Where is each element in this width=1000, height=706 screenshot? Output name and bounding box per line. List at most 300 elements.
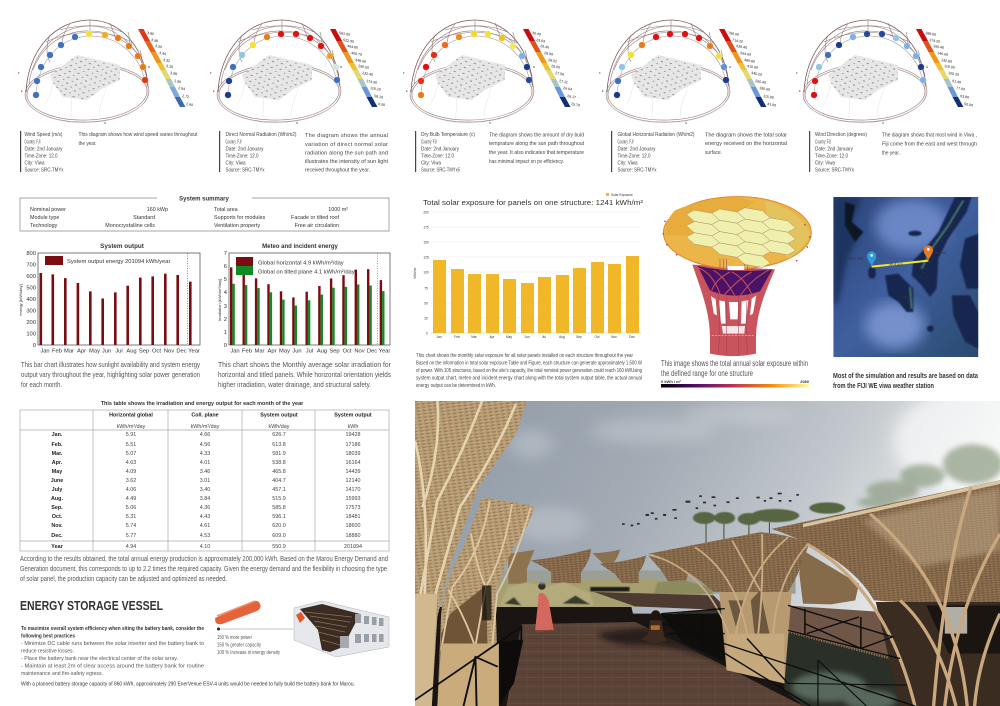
text: battery siting practices <box>21 626 204 677</box>
chart legend: System output energy 201094 kWh/year <box>67 259 171 265</box>
table: irradiation and energy output: Jan. <box>52 432 63 438</box>
panel: direct normal radiation sun path <box>210 20 388 174</box>
table: irradiation and energy output: 609.0 <box>272 533 286 539</box>
table: irradiation and energy output: 4.06 <box>126 487 136 493</box>
table: irradiation and energy output: 4.61 <box>200 523 210 529</box>
table: irradiation and energy output: 17186 <box>346 442 360 448</box>
legend: wind speed <box>138 29 193 107</box>
table: irradiation and energy output: 4.63 <box>126 460 136 466</box>
text: battery capacity note: With a planned battery storage capacity of 860 kWh, approximately 290 EnerVenue ESV-4 units would be needed to fully build the battery bank for Marou. <box>21 682 355 688</box>
chart axis labels: Dec <box>629 335 635 339</box>
axis labels: Year <box>188 348 200 354</box>
table: irradiation and energy output: 4.43 <box>200 514 210 520</box>
caption: global horizontal radiation data: Country: FJI <box>618 140 634 146</box>
table: irradiation and energy output: 4.01 <box>200 460 210 466</box>
axis labels: Mar <box>255 348 265 354</box>
pin: Marou: Marou <box>935 250 946 255</box>
table: irradiation and energy output: July <box>52 487 62 493</box>
legend: dry bulb temperature: 29.93 <box>536 38 545 44</box>
lower right ground <box>788 606 888 656</box>
description: wind direction: Fiji come from the east and west through <box>882 142 977 148</box>
legend: direct normal radiation: 581.00 <box>339 31 350 37</box>
chart: monthly solar exposure <box>413 193 644 339</box>
caption: wind direction data: Date: 2nd January <box>815 146 853 152</box>
canopy: large right <box>771 480 1000 706</box>
axis labels: energy [kWh/day] <box>18 284 23 316</box>
chart legend <box>236 257 355 276</box>
illustration: funnel structure solar exposure <box>662 197 811 356</box>
caption: direct normal radiation data: Date: 2nd January <box>226 146 264 152</box>
chart title: Meteo and incident energy <box>262 244 338 250</box>
chart axis labels: 175 <box>423 226 429 230</box>
description: direct normal radiation: received throughout the year. <box>305 168 370 174</box>
axis labels: Aug <box>317 348 327 354</box>
table: irradiation and energy output: 550.9 <box>272 544 286 550</box>
legend: wind speed: 3.56 <box>155 44 162 49</box>
canopy: distant right <box>799 551 859 604</box>
heading: system summary: System summary <box>179 196 230 202</box>
flock of birds <box>622 493 799 526</box>
text: system output explanation: This bar chart illustrates how sunlight availability and system energy <box>21 360 200 369</box>
table: irradiation and energy output: 18880 <box>346 533 360 539</box>
text: annual production conclusion: of solar panel, the production capacity can be adjusted and optimized as needed. <box>20 574 227 583</box>
text: solar exposure explanation: This chart shows the monthly solar exposure for all solar panels installed on each structure throughout the year <box>416 353 633 359</box>
legend: wind direction: 77.60 <box>956 86 965 92</box>
chart axis labels: Sep <box>576 335 582 339</box>
text: funnel structure explanation <box>661 359 808 378</box>
caption: wind direction data: Source: SRC-TMYx <box>815 168 854 174</box>
axis labels: 1 <box>224 330 227 336</box>
legend: global horizontal radiation: 489.80 <box>744 58 755 64</box>
description: dry bulb temperature: The diagram shows the amount of dry buld <box>489 132 584 138</box>
axis labels: 700 <box>26 262 36 268</box>
legend: direct normal radiation: 58.10 <box>374 94 383 100</box>
axis labels: 0 <box>33 343 36 349</box>
text: battery benefits: 100 % Increase in energy density <box>217 650 280 656</box>
summary rows: Technology <box>30 223 58 229</box>
legend: global horizontal radiation: 639.40 <box>736 44 747 50</box>
legend: wind direction: 119.00 <box>944 64 955 70</box>
table: irradiation and energy output: 5.51 <box>126 442 136 448</box>
chart axis labels: Jul <box>542 335 546 339</box>
legend: direct normal radiation: 464.80 <box>347 44 358 50</box>
chart axis labels: Aug <box>559 335 565 339</box>
table: irradiation and energy output: 18039 <box>346 451 360 457</box>
description: direct normal radiation: radiation along the sun path and <box>305 150 388 156</box>
axis labels: Irradiation [kWh/m²/day] <box>217 279 222 321</box>
sun positions: dry bulb temperature <box>418 31 532 98</box>
table: irradiation and energy output: 4.66 <box>200 432 210 438</box>
table: irradiation and energy output: 17573 <box>346 505 360 511</box>
chart axis labels: 200 <box>423 210 429 214</box>
table: irradiation and energy output: 12140 <box>346 478 360 484</box>
summary rows: Supports for modules <box>214 215 266 221</box>
text: solar exposure explanation: energy output can be determined in kWh. <box>416 383 496 389</box>
legend: wind speed: 3.32 <box>163 58 170 63</box>
description: dry bulb temperature: the year. It also indicates that temperature <box>489 150 584 156</box>
axis labels: Dec <box>176 348 187 354</box>
table: irradiation and energy output: Coll. plane <box>191 412 219 418</box>
caption: dry bulb temperature data: Country: FJI <box>421 140 437 146</box>
axis labels: Feb <box>52 348 62 354</box>
table: irradiation and energy output: 5.91 <box>126 432 136 438</box>
caption: dry bulb temperature data: Time-Zone: 12.0 <box>421 154 454 160</box>
legend: exposure colour scale: 0 kWh / m² <box>661 379 682 384</box>
legend: wind direction: 63.80 <box>960 94 969 100</box>
legend: global horizontal radiation: 115.80 <box>763 94 774 100</box>
legend: direct normal radiation: 232.40 <box>362 71 373 77</box>
railing <box>415 605 915 706</box>
table: irradiation and energy output: 14170 <box>346 487 360 493</box>
text: solar exposure explanation: Based on the information in total solar exposure Table and Figure, each structure can generate approximately 1,500 W <box>416 360 643 366</box>
caption: wind speed data: Date: 2nd January <box>24 146 63 152</box>
legend: direct normal radiation: 290.50 <box>358 64 369 70</box>
caption: wind speed data <box>20 131 64 174</box>
summary rows: Module type <box>30 215 59 221</box>
text: battery siting practices: - Place the battery bank near the electrical center of the solar array. <box>21 656 178 662</box>
legend: global horizontal radiation: 265.40 <box>755 79 766 85</box>
text: data source note: from the FIJI WE viwa weather station <box>833 381 934 390</box>
pin: Marou <box>924 245 946 260</box>
axis labels: 200 <box>26 320 36 326</box>
table: irradiation and energy output: 465.8 <box>272 469 286 475</box>
legend: dry bulb temperature: 26.17 <box>567 94 576 100</box>
legend: wind speed: 3.80 <box>147 31 154 36</box>
axis labels: Nov <box>164 348 174 354</box>
text: system output explanation: output vary throughout the year, highlighting solar power generation <box>21 370 200 379</box>
axis labels: Feb <box>242 348 252 354</box>
table: irradiation and energy output: System output <box>334 412 372 418</box>
legend: direct normal radiation: 522.90 <box>343 38 354 44</box>
chart axis labels: 75 <box>424 286 428 290</box>
legend: wind direction: 160.40 <box>933 44 944 50</box>
caption: wind speed data: Country: FJI <box>24 140 41 146</box>
description: dry bulb temperature <box>489 132 584 165</box>
description: wind direction: the year. <box>882 150 900 156</box>
legend: wind speed: 2.84 <box>178 86 185 91</box>
table: irradiation and energy output: 5.07 <box>126 451 136 457</box>
text: funnel structure explanation: This image shows the total annual solar exposure within <box>661 359 808 368</box>
table: irradiation and energy output: Oct. <box>52 514 63 520</box>
table: irradiation and energy output: System output <box>260 412 298 418</box>
distant horizon <box>497 570 796 594</box>
text: battery benefits: 150 % greater capacity <box>217 642 261 648</box>
table: irradiation and energy output: 18481 <box>346 514 360 520</box>
legend: wind direction: 132.80 <box>941 58 952 64</box>
legend: global horizontal radiation: 190.60 <box>759 86 770 92</box>
legend: wind speed: 2.96 <box>174 79 181 84</box>
table: irradiation and energy output: 4.36 <box>200 505 210 511</box>
legend: global horizontal radiation: 340.20 <box>751 71 762 77</box>
description: global horizontal radiation: The diagram shows the total solar <box>705 132 787 138</box>
solar panel hexagons <box>686 197 796 273</box>
figure: seated woman <box>641 610 667 644</box>
legend: direct normal radiation: 0.00 <box>378 102 385 107</box>
table: irradiation and energy output: Aug. <box>51 496 63 502</box>
axis labels: Jun <box>102 348 111 354</box>
description: global horizontal radiation: surface. <box>705 150 722 156</box>
text: annual production conclusion <box>20 554 388 583</box>
legend: direct normal radiation: 174.30 <box>366 79 377 85</box>
legend: wind direction: 91.40 <box>952 79 961 85</box>
text: annual production conclusion: Generation document, this corresponds to up to 2.2 times the required capacity. Given the energy demand and the flexibility in choosing the type <box>20 564 387 573</box>
table: irradiation and energy output: 404.7 <box>272 478 286 484</box>
caption: wind direction data: Wind Direction (degrees) <box>815 132 867 138</box>
caption: global horizontal radiation data: Source: SRC-TMYx <box>618 168 657 174</box>
axis labels: Jan <box>230 348 240 354</box>
description: dry bulb temperature: has minimal impact on pv efficiency. <box>489 159 564 165</box>
caption: direct normal radiation data: Source: SRC-TMYx <box>226 168 265 174</box>
legend: wind speed: 3.20 <box>166 64 173 69</box>
table: irradiation and energy output: Dec. <box>51 533 63 539</box>
text: annual production conclusion: According to the results obtained, the total annual energy production is approximately 200,000 kWh. Based on the Marou Energy Demand and <box>20 554 388 563</box>
table: irradiation and energy output: 4.56 <box>200 442 210 448</box>
legend: wind direction: 50.00 <box>964 102 973 108</box>
legend: wind direction: 188.00 <box>925 31 936 37</box>
chart axis labels: May <box>506 335 512 339</box>
table: irradiation and energy output: May <box>52 469 62 475</box>
legend: direct normal radiation: 406.70 <box>351 51 362 57</box>
description: wind speed <box>78 132 198 147</box>
legend: dry bulb temperature: 26.64 <box>563 86 572 92</box>
sun positions: wind direction <box>811 31 926 98</box>
axis labels: 6 <box>224 264 227 270</box>
panel: global horizontal radiation sun path <box>599 20 787 174</box>
text: battery benefits <box>217 635 280 656</box>
text: solar exposure explanation: of power. With 105 structures, based on the site's capacity, the total nominal power generation could reach 160 kWUsing <box>416 368 642 374</box>
text: battery siting practices: maintenance and fire-safety egress. <box>21 671 103 677</box>
table: irradiation and energy output: Nov. <box>51 523 63 529</box>
axis labels: Apr <box>77 348 86 354</box>
axis labels: Sep <box>329 348 340 354</box>
description: direct normal radiation: The diagram shows the annual <box>305 133 388 139</box>
grasses and hedges <box>499 580 713 607</box>
table: irradiation and energy output: 457.1 <box>272 487 286 493</box>
table: irradiation and energy output: June <box>51 478 63 484</box>
legend: dry bulb temperature: 28.05 <box>551 64 560 70</box>
chart axis labels: Feb <box>454 335 460 339</box>
caption: wind direction data <box>809 131 867 174</box>
pin: Viwa: Viwa 3381 Fiji <box>838 256 863 261</box>
legend: dry bulb temperature: 25.70 <box>571 102 580 108</box>
caption: direct normal radiation data <box>219 131 297 174</box>
table: irradiation and energy output: 5.74 <box>126 523 136 529</box>
description: dry bulb temperature: temprature along the sun path throughout <box>489 141 584 147</box>
sky <box>415 401 1000 614</box>
panel: wind direction sun path <box>796 20 977 174</box>
axis labels: 0 <box>224 343 227 349</box>
legend: exposure colour scale <box>661 379 810 388</box>
legend: exposure colour scale: 2080 <box>800 379 810 384</box>
description: direct normal radiation: illustrates the intensity of sun light <box>305 159 388 165</box>
description: wind direction <box>882 132 977 156</box>
table: irradiation and energy output: 14439 <box>346 469 360 475</box>
text: meteo chart explanation: horizontal and titled panels. While horizontal orientation yields <box>218 370 391 379</box>
description: direct normal radiation <box>305 133 388 174</box>
description: global horizontal radiation <box>705 132 787 156</box>
table: irradiation and energy output: 18600 <box>346 523 360 529</box>
global on tilted plane bars <box>232 284 384 345</box>
legend: wind speed: 2.60 <box>186 102 193 107</box>
chart axis labels: Oct <box>595 335 600 339</box>
text: data source note <box>833 371 979 390</box>
axis labels: 300 <box>26 308 36 314</box>
legend: wind speed: 3.08 <box>170 71 177 76</box>
chart axis labels: Mar <box>471 335 478 339</box>
table: irradiation and energy output: 3.84 <box>200 496 210 502</box>
description: wind speed: the year. <box>78 141 97 147</box>
table: irradiation and energy output: 3.46 <box>200 469 210 475</box>
chart axis labels: 150 <box>423 240 429 244</box>
table: irradiation and energy output: Horizontal global <box>109 412 153 418</box>
text: battery siting practices: - Maintain at least 2m of clear access around the battery bank for routine <box>21 664 204 670</box>
axis labels: May <box>89 348 100 354</box>
summary rows: 160 kWp <box>147 207 168 213</box>
table: irradiation and energy output: 4.33 <box>200 451 210 457</box>
plaza and planter wall <box>594 592 728 610</box>
panel: system summary <box>20 196 389 231</box>
table: irradiation and energy output: 19428 <box>346 432 360 438</box>
panel: dry bulb temperature sun path <box>403 20 584 174</box>
text: system output explanation: for each month. <box>21 380 62 389</box>
table: irradiation and energy output: 3.62 <box>126 478 136 484</box>
chart axis labels: 25 <box>424 316 428 320</box>
table: irradiation and energy output: 4.10 <box>200 544 210 550</box>
chart legend: Solar Exposure <box>611 193 633 197</box>
figure: walking woman <box>535 582 557 632</box>
chart title: System output <box>100 243 145 250</box>
table: irradiation and energy output: 3.01 <box>200 478 210 484</box>
legend: direct normal radiation: 116.20 <box>370 86 381 92</box>
canopy: large left foreground <box>415 401 527 706</box>
text: battery benefits: 150 % more power <box>217 635 252 641</box>
axis labels: 5 <box>224 277 227 283</box>
summary rows: Facade or tilted roof <box>291 215 339 221</box>
axis labels: Mar <box>64 348 74 354</box>
panel: wind speed sun path <box>18 20 198 174</box>
axis labels: Oct <box>152 348 161 354</box>
table: irradiation and energy output: 5.31 <box>126 514 136 520</box>
caption: dry bulb temperature data: City: Viwa <box>421 160 442 166</box>
summary rows: Free air circulation <box>295 223 339 229</box>
axis labels: Apr <box>267 348 277 354</box>
description: wind speed: This diagram shows how wind speed varies throughout <box>78 132 198 138</box>
axis labels: Jan <box>40 348 50 354</box>
caption: dry bulb temperature data <box>415 131 475 174</box>
summary rows: 1000 m² <box>328 207 348 213</box>
table: irradiation and energy output: kWh <box>348 424 358 430</box>
table: irradiation and energy output: Apr. <box>52 460 63 466</box>
table: irradiation and energy output: 585.8 <box>272 505 286 511</box>
axis labels: 100 <box>26 332 36 338</box>
text: meteo chart explanation <box>218 360 391 389</box>
summary rows: Total area <box>214 207 238 213</box>
table: irradiation and energy output: Feb. <box>51 442 63 448</box>
caption: global horizontal radiation data: Date: 2nd January <box>618 146 656 152</box>
axis labels <box>217 251 390 354</box>
table: irradiation and energy output: Mar. <box>52 451 63 457</box>
table: irradiation and energy output: 4.09 <box>126 469 136 475</box>
caption: wind direction data: Time-Zone: 12.0 <box>815 154 848 160</box>
table: irradiation and energy output: kWh/m²/day <box>191 424 220 430</box>
table: irradiation and energy output: Year <box>51 544 64 550</box>
legend: wind speed: 2.72 <box>182 94 189 99</box>
photo: bamboo canopy walkway rendering <box>415 388 1000 706</box>
axis labels: 800 <box>26 251 36 257</box>
legend: wind speed: 3.68 <box>151 38 158 43</box>
table: irradiation and energy output: 515.9 <box>272 496 286 502</box>
caption: wind direction data: Country: FJI <box>815 140 831 146</box>
table: irradiation and energy output: 626.7 <box>272 432 286 438</box>
table: irradiation and energy output: 596.1 <box>272 514 286 520</box>
legend: wind direction: 105.20 <box>948 71 959 77</box>
table: irradiation and energy output: 5.77 <box>126 533 136 539</box>
caption: wind direction data: City: Viwa <box>815 160 836 166</box>
chart axis labels: Jan <box>436 335 442 339</box>
caption: wind speed data: City: Viwa <box>24 160 45 166</box>
map: Viwa to Marou: Yalobi <box>899 294 910 299</box>
sun positions: direct normal radiation <box>225 31 340 98</box>
axis labels: Sep <box>139 348 149 354</box>
axis labels: Oct <box>342 348 352 354</box>
icon: battery vessel <box>215 601 293 630</box>
table: irradiation and energy output: 4.53 <box>200 533 210 539</box>
table: irradiation and energy output: 4.94 <box>126 544 136 550</box>
caption: direct normal radiation data: Country: FJI <box>226 140 242 146</box>
table: irradiation and energy output: 3.40 <box>200 487 210 493</box>
table: irradiation and energy output: 581.9 <box>272 451 286 457</box>
caption: direct normal radiation data: City: Viwa <box>226 160 246 166</box>
palm trees <box>693 444 1000 544</box>
text: meteo chart explanation: higher irradiation, water drainage, and structural safety. <box>218 380 371 389</box>
chart axis labels <box>413 210 635 339</box>
canopy: centre <box>648 532 809 683</box>
text: system output explanation <box>21 360 200 389</box>
caption: dry bulb temperature data: Date: 2nd January <box>421 146 459 152</box>
deck <box>506 622 803 706</box>
description: wind direction: The diagram shows that most wind in Viwa , <box>882 132 977 138</box>
legend: wind direction <box>916 29 973 108</box>
axis labels: May <box>279 348 290 354</box>
axis labels: Jul <box>306 348 313 354</box>
axis labels: Jul <box>115 348 123 354</box>
axis labels: Jun <box>292 348 302 354</box>
axis labels: Nov <box>354 348 365 354</box>
icon: battery container <box>294 601 389 657</box>
chart: system output <box>18 243 200 354</box>
text: battery siting practices: reduce resistive losses. <box>21 648 74 654</box>
summary rows: Monocrystalline cells <box>105 223 155 229</box>
table: irradiation and energy output: Sep. <box>51 505 63 511</box>
caption: dry bulb temperature data: Source: SRC-TMYx5 <box>421 168 460 174</box>
axis labels: Dec <box>367 348 377 354</box>
table: irradiation and energy output: 4.49 <box>126 496 136 502</box>
map: Viwa to Marou: 30.4 km <box>889 262 903 267</box>
text: funnel structure explanation: the defined range for one structure <box>661 369 753 378</box>
legend: dry bulb temperature: 27.11 <box>559 79 568 85</box>
caption: direct normal radiation data: Time-Zone: 12.0 <box>226 154 258 160</box>
caption: global horizontal radiation data: Global Horizontal Radiation (Wh/m2) <box>618 132 695 138</box>
table: irradiation and energy output: 15993 <box>346 496 360 502</box>
chart axis labels: 125 <box>423 256 429 260</box>
canopy: mid left <box>437 497 534 706</box>
summary rows: Ventilation property <box>214 223 260 229</box>
table: irradiation and energy output: 538.8 <box>272 460 286 466</box>
axis labels: 600 <box>26 274 36 280</box>
axis labels: 500 <box>26 286 36 292</box>
legend: global horizontal radiation: 564.60 <box>740 51 751 57</box>
map: Viwa to Marou: YASAWA ISLANDS <box>918 211 961 280</box>
